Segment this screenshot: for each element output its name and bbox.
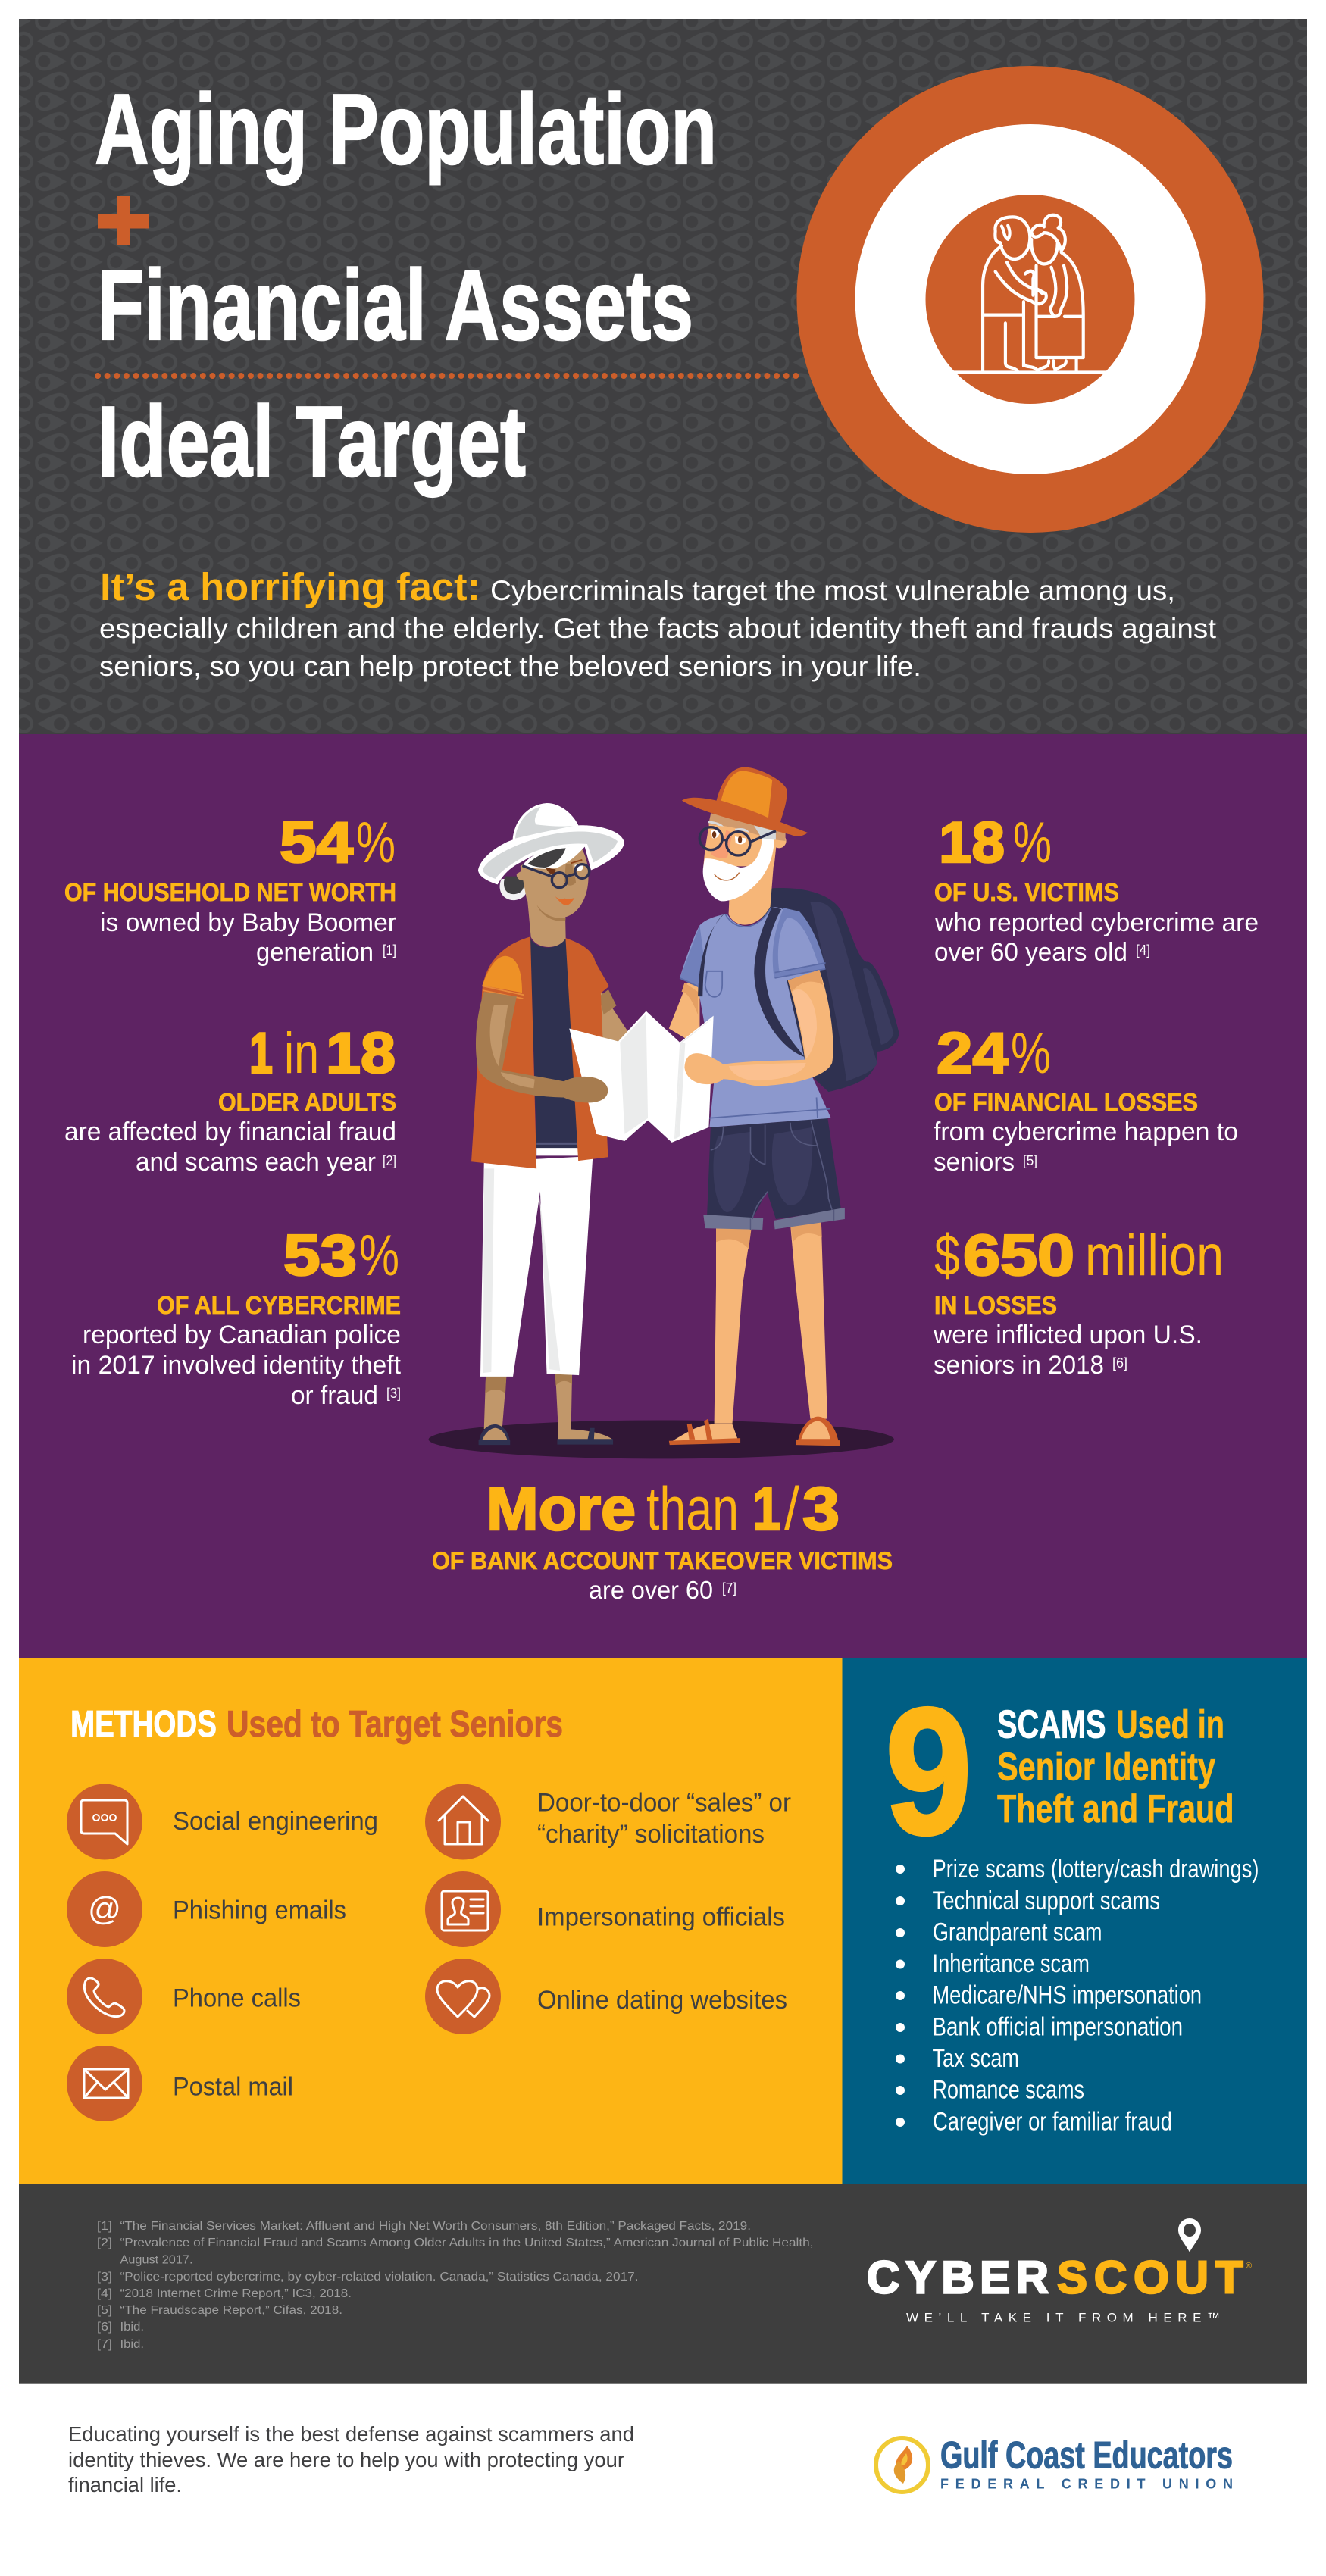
stat: 1 in 18: 1 xyxy=(249,1021,273,1086)
callout: more than 1/3: OF BANK ACCOUNT TAKEOVER VICTIMS xyxy=(432,1547,893,1574)
scam list: Technical support scams xyxy=(932,1887,1160,1915)
stat: 54%: 54 xyxy=(280,811,353,875)
stat: 1 in 18: 18 xyxy=(326,1021,396,1086)
method: online dating xyxy=(425,1959,787,2034)
heading: methods xyxy=(70,1704,563,1745)
logo: CyberScout: ® xyxy=(1246,2262,1252,2271)
stat: 1 in 18: and scams each year xyxy=(136,1148,376,1177)
logo: CyberScout: CYBER xyxy=(867,2252,1049,2303)
stat: 24%: from cybercrime happen to xyxy=(934,1118,1238,1146)
panel: statistics xyxy=(19,734,1307,1658)
stat: 24%: seniors xyxy=(934,1148,1015,1177)
stat: $650 million: seniors in 2018 xyxy=(934,1351,1104,1380)
callout: more than 1/3: 3 xyxy=(802,1475,840,1543)
heading: scams: SCAMS xyxy=(997,1703,1106,1747)
references list xyxy=(97,2220,814,2351)
stat: 53%: in 2017 involved identity theft xyxy=(71,1351,402,1380)
method: postal mail xyxy=(67,2046,293,2121)
scam list: Medicare/NHS impersonation xyxy=(932,1980,1202,2009)
logo: Gulf Coast Educators: Gulf Coast Educators xyxy=(940,2434,1233,2476)
ground shadow xyxy=(429,1420,894,1458)
method: phishing emails: @ xyxy=(88,1890,121,1927)
stat: $650 million: [6] xyxy=(1112,1355,1127,1371)
references list: Ibid. xyxy=(120,2338,144,2351)
intro paragraph: Cybercriminals target the most vulnerable among us, xyxy=(490,575,1175,606)
stat: 1 in 18 xyxy=(64,1021,396,1177)
big number 9: 9 xyxy=(885,1671,972,1872)
stat: 18%: over 60 years old xyxy=(934,938,1127,967)
panel: nine scams xyxy=(843,1658,1307,2184)
heading: methods: METHODS xyxy=(70,1704,217,1745)
scam list: Tax scam xyxy=(932,2044,1019,2073)
woman xyxy=(471,803,629,1445)
scam list: Bank official impersonation xyxy=(932,2012,1183,2041)
method: door to door: “charity” solicitations xyxy=(537,1820,765,1849)
stat: 18%: [4] xyxy=(1136,943,1150,958)
method: door to door: Door-to-door “sales” or xyxy=(537,1788,791,1817)
intro paragraph: It’s a horrifying fact: xyxy=(100,565,480,608)
method: social engineering: Social engineering xyxy=(173,1807,378,1836)
stat: 1 in 18: in xyxy=(284,1021,319,1086)
stat: 18%: 18 xyxy=(939,811,1005,875)
references list: Ibid. xyxy=(120,2321,144,2334)
references list: [6] xyxy=(97,2321,112,2334)
method: postal mail: Postal mail xyxy=(173,2073,293,2102)
stat: 24%: OF FINANCIAL LOSSES xyxy=(934,1088,1198,1116)
stat: 24%: % xyxy=(1011,1021,1051,1086)
references list: [1] xyxy=(97,2220,112,2233)
stat: 54% xyxy=(64,811,396,967)
scam list: Caregiver or familiar fraud xyxy=(933,2108,1172,2137)
references list: [3] xyxy=(97,2271,112,2284)
stat: 1 in 18: are affected by financial fraud xyxy=(64,1118,396,1146)
heading: scams: Used in xyxy=(1116,1703,1224,1747)
logo: CyberScout: WE’LL TAKE IT FROM HERE™ xyxy=(906,2311,1220,2324)
callout: more than 1/3: More xyxy=(486,1475,636,1543)
callout: more than 1/3: / xyxy=(784,1475,799,1543)
method: impersonating officials: Impersonating officials xyxy=(537,1903,785,1932)
method: impersonating officials xyxy=(425,1871,785,1947)
stat: 54%: generation xyxy=(256,938,374,967)
title: Aging Population: Aging Population xyxy=(95,73,717,185)
heading: scams: Theft and Fraud xyxy=(997,1787,1234,1831)
method: phishing emails xyxy=(67,1871,346,1947)
references list: [2] xyxy=(97,2237,112,2249)
heading: scams: Senior Identity xyxy=(997,1746,1215,1790)
stat: 54%: OF HOUSEHOLD NET WORTH xyxy=(64,878,396,906)
title: Ideal Target: Ideal Target xyxy=(98,386,526,497)
method: social engineering xyxy=(67,1784,378,1859)
callout: more than 1/3: than xyxy=(646,1475,739,1543)
panel: sources footer xyxy=(19,2184,1307,2384)
method: door to door xyxy=(425,1784,791,1859)
icon: plus sign xyxy=(98,196,149,245)
stat: 53% xyxy=(71,1224,402,1410)
stat: 54%: % xyxy=(356,811,396,875)
stat: 24% xyxy=(934,1021,1238,1177)
panel: methods xyxy=(19,1658,843,2184)
references list: “2018 Internet Crime Report,” IC3, 2018. xyxy=(120,2287,352,2300)
references list: “Prevalence of Financial Fraud and Scams Among Older Adults in the United States,” American Journal of Public Health, xyxy=(120,2237,814,2249)
logo: Gulf Coast Educators xyxy=(876,2434,1233,2492)
stat: $650 million: $ xyxy=(934,1224,960,1288)
stat: 18%: who reported cybercrime are xyxy=(934,908,1259,937)
icon: target with elderly couple xyxy=(797,66,1264,533)
heading: scams xyxy=(997,1703,1234,1831)
references list: [4] xyxy=(97,2287,112,2300)
closing statement: Educating yourself is the best defense against scammers and xyxy=(68,2422,634,2446)
panel: header xyxy=(19,19,1307,734)
stat: 54%: [1] xyxy=(383,943,396,958)
callout: more than 1/3: are over 60 xyxy=(589,1576,713,1604)
stat: 24%: 24 xyxy=(937,1021,1009,1086)
stat: 53%: or fraud xyxy=(291,1381,378,1410)
stat: $650 million: were inflicted upon U.S. xyxy=(933,1321,1202,1349)
stat: 54%: is owned by Baby Boomer xyxy=(100,908,396,937)
references list: August 2017. xyxy=(120,2253,192,2267)
scam list: Romance scams xyxy=(932,2076,1084,2105)
dotted equals rule xyxy=(98,373,802,379)
map xyxy=(569,1011,714,1143)
references list: “The Financial Services Market: Affluent and High Net Worth Consumers, 8th Edition,” Packaged Facts, 2019. xyxy=(120,2220,751,2233)
hands and forearms over the map xyxy=(533,970,833,1102)
references list: [5] xyxy=(97,2304,112,2317)
scam list: Inheritance scam xyxy=(932,1949,1090,1978)
stat: $650 million: IN LOSSES xyxy=(934,1291,1057,1319)
heading: methods: Used to Target Seniors xyxy=(227,1704,563,1745)
references list: “The Fraudscape Report,” Cifas, 2018. xyxy=(120,2304,342,2317)
callout: more than 1/3: 1 xyxy=(752,1475,780,1543)
method: phone calls: Phone calls xyxy=(173,1984,301,2012)
closing statement: identity thieves. We are here to help you with protecting your xyxy=(68,2448,624,2471)
stat: 53%: reported by Canadian police xyxy=(83,1321,401,1349)
stat: 24%: [5] xyxy=(1023,1153,1037,1168)
stat: $650 million: million xyxy=(1085,1224,1224,1288)
illustration: senior couple reading a map xyxy=(429,767,899,1458)
intro paragraph xyxy=(99,565,1217,682)
callout: more than 1/3: [7] xyxy=(722,1580,736,1596)
stat: 1 in 18: OLDER ADULTS xyxy=(218,1088,396,1116)
method: phone calls xyxy=(67,1959,301,2034)
scam list xyxy=(896,1855,1259,2137)
logo: CyberScout: SCOUT xyxy=(1057,2252,1243,2303)
intro paragraph: especially children and the elderly. Get the facts about identity theft and frauds against xyxy=(99,613,1217,644)
man xyxy=(669,767,899,1446)
closing statement: financial life. xyxy=(68,2473,182,2496)
stat: $650 million xyxy=(933,1224,1224,1380)
title: Financial Assets: Financial Assets xyxy=(98,249,693,361)
closing statement xyxy=(68,2422,634,2496)
stat: 53%: 53 xyxy=(283,1224,357,1288)
callout: more than 1/3 xyxy=(432,1475,893,1604)
stat: $650 million: 650 xyxy=(963,1224,1074,1288)
logo: CyberScout xyxy=(867,2218,1252,2324)
stat: 18% xyxy=(934,811,1259,967)
stat: 53%: [3] xyxy=(386,1386,401,1401)
references list: [7] xyxy=(97,2338,112,2351)
stat: 18%: % xyxy=(1013,811,1052,875)
method: online dating: Online dating websites xyxy=(537,1986,787,2015)
logo: Gulf Coast Educators: FEDERAL CREDIT UNION xyxy=(940,2476,1233,2491)
stat: 53%: OF ALL CYBERCRIME xyxy=(157,1291,401,1319)
references list: “Police-reported cybercrime, by cyber-related violation. Canada,” Statistics Canada, 2017. xyxy=(120,2271,638,2284)
method: phishing emails: Phishing emails xyxy=(173,1896,346,1924)
stat: 18%: OF U.S. VICTIMS xyxy=(934,878,1119,906)
stat: 1 in 18: [2] xyxy=(383,1153,396,1168)
stat: 53%: % xyxy=(359,1224,399,1288)
scam list: Grandparent scam xyxy=(933,1918,1102,1947)
intro paragraph: seniors, so you can help protect the beloved seniors in your life. xyxy=(99,651,921,682)
